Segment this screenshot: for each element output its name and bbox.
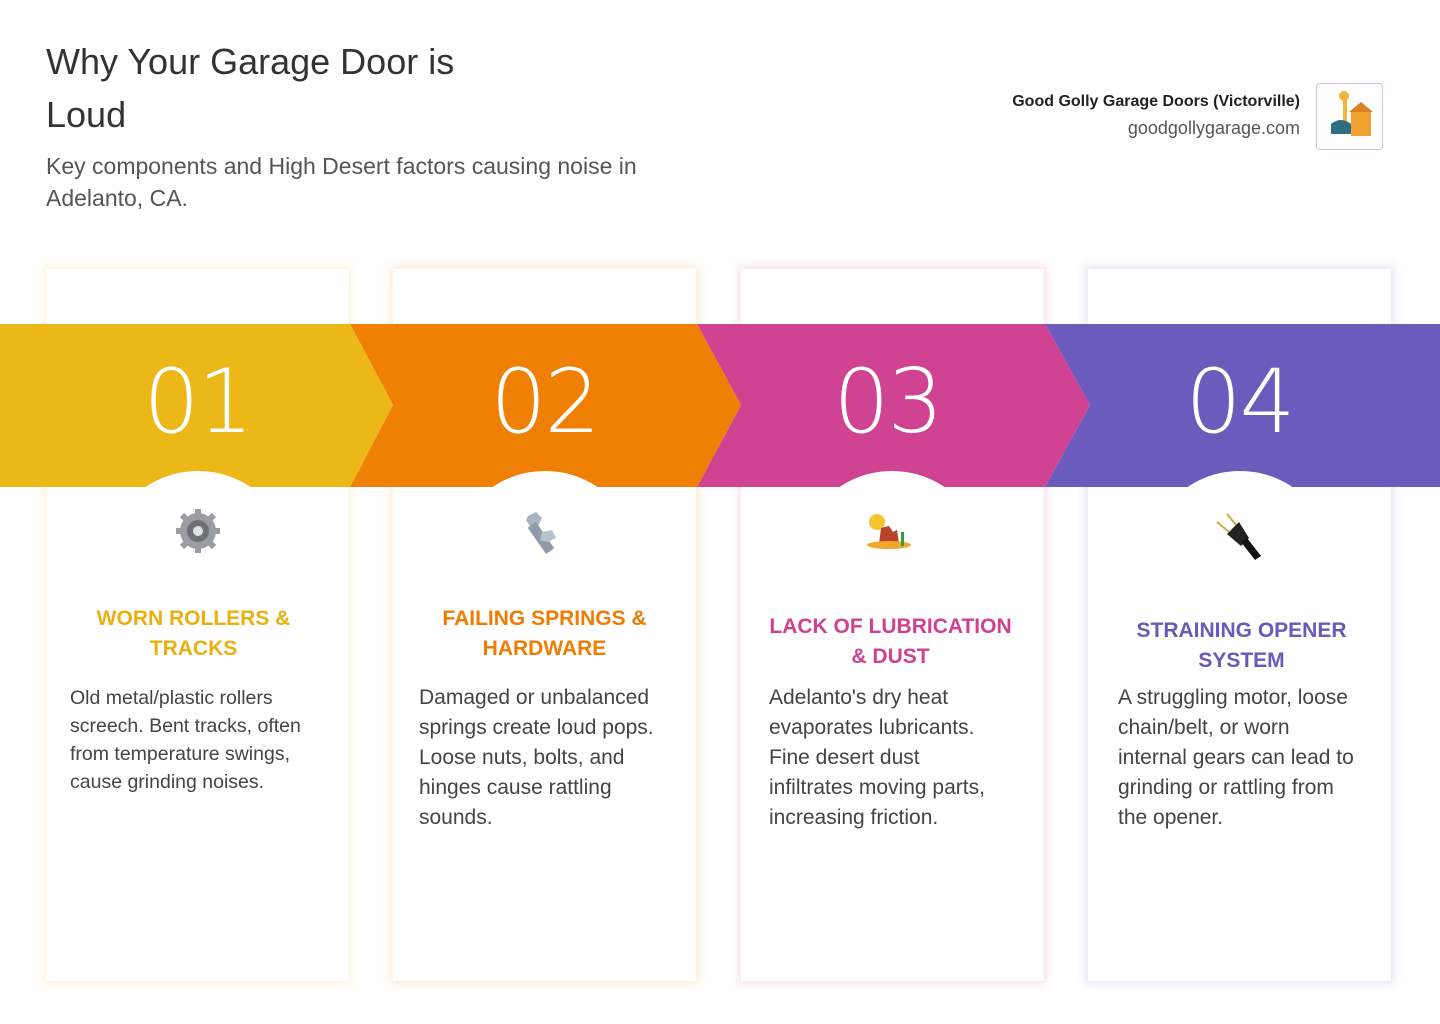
number 02: 02: [490, 350, 598, 453]
icon: desert: [867, 514, 911, 549]
card 2 text: Damaged or unbalanced springs create loud pops. Loose nuts, bolts, and hinges cause rattling sounds.: [419, 686, 654, 829]
card 3 heading: & DUST: [851, 645, 930, 668]
card 2 heading: [442, 607, 647, 660]
number 04: 04: [1186, 350, 1293, 453]
number 01: 01: [144, 350, 251, 453]
brand name: Good Golly Garage Doors (Victorville): [1012, 93, 1300, 110]
brand url: goodgollygarage.com: [1128, 118, 1300, 138]
card 4 heading: [1136, 619, 1347, 672]
icon: gear: [176, 509, 220, 553]
card 3: [741, 269, 1044, 981]
card 1 text: Old metal/plastic rollers screech. Bent tracks, often from temperature swings, cause grinding noises.: [70, 687, 301, 793]
card 1 heading: WORN ROLLERS &: [97, 607, 290, 630]
card 1: [46, 269, 349, 981]
subtitle: Key components and High Desert factors causing noise in Adelanto, CA.: [46, 153, 637, 211]
card 3 heading: [769, 615, 1012, 668]
card 2 heading: FAILING SPRINGS &: [442, 607, 647, 630]
number 03: 03: [834, 350, 941, 453]
card 4 heading: STRAINING OPENER: [1136, 619, 1347, 642]
title: [46, 41, 454, 135]
card 3 text: Adelanto's dry heat evaporates lubricants. Fine desert dust infiltrates moving parts, increasing friction.: [769, 686, 985, 829]
title: Loud: [46, 94, 126, 135]
card 2 heading: HARDWARE: [483, 637, 606, 660]
icon: bolt: [526, 512, 556, 554]
logo: [1316, 83, 1383, 150]
title: Why Your Garage Door is: [46, 41, 454, 82]
icon: plug: [1216, 513, 1261, 560]
brand block: [1012, 83, 1383, 150]
card 2: [393, 269, 696, 981]
card 4: [1088, 269, 1391, 981]
card 4 heading: SYSTEM: [1198, 649, 1285, 672]
banner arrows: [0, 324, 1440, 487]
card 1 heading: TRACKS: [150, 637, 237, 660]
card 1 heading: [96, 607, 290, 660]
card 4 text: A struggling motor, loose chain/belt, or worn internal gears can lead to grinding or rattling from the opener.: [1118, 686, 1354, 829]
card 3 heading: LACK OF LUBRICATION: [769, 615, 1012, 638]
